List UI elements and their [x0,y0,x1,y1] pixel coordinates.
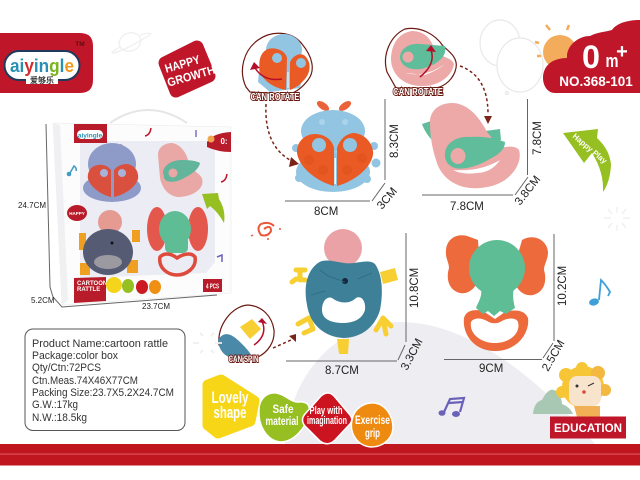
dimensions: box: 24.7CM [18,201,46,210]
product box [53,110,231,305]
box badge [67,205,87,221]
arrow: ladybug [266,104,299,167]
badge: happy growth: GROWTH [166,63,217,90]
dimensions: ladybug: 8.3CM [389,124,401,158]
callout: ladybug can rotate [242,33,312,103]
info panel: Ctn.Meas.74X46X77CM [32,375,138,387]
dimensions: elephant [444,234,569,375]
box logo [74,124,107,143]
callout: turtle can spin: CAN SPIN [228,354,259,365]
box elephant [147,207,208,275]
info panel [25,329,185,430]
background hill [285,322,595,444]
dimensions: ladybug: 8CM [314,206,338,218]
balloons [480,20,543,94]
icon: lion mascot [556,362,611,417]
dimensions: elephant: 2.5CM [540,338,568,374]
info panel: Product Name:cartoon rattle [32,338,168,350]
dimensions: bird [422,99,544,213]
toy: elephant [446,235,548,351]
feature badge: play with imagination: imagination [307,415,347,427]
box tag: 4 pcs: 4 PCS [206,284,219,290]
icon: sparkle [604,207,630,231]
dimensions: box: 23.7CM [142,302,170,311]
box music notes [67,128,227,262]
dimensions: box: 5.2CM [31,296,55,305]
icon: bush [533,390,573,414]
toy: bird [422,103,520,188]
icon: spiral [251,223,281,240]
dimensions: box [18,124,217,311]
label: education: EDUCATION [554,423,622,435]
toy: ladybug [292,99,380,192]
box ladybug [83,143,141,202]
feature badge: lovely shape: Lovely [212,388,249,407]
dimensions: bird: 7.8CM [532,121,544,155]
callout: turtle can spin [218,305,274,365]
box age tag [207,132,231,152]
feature badge: exercise grip: Exercise [355,413,390,427]
sun [535,25,577,69]
age cloud badge: + [616,41,628,63]
age cloud badge [543,20,640,93]
age cloud badge: m [606,51,618,71]
toy: turtle [292,229,398,354]
callout: ladybug can rotate: CAN ROTATE [250,92,300,103]
age cloud badge: 0 [582,39,600,75]
box text panel [74,277,161,303]
info panel: Qty/Ctn:72PCS [32,362,101,374]
box text panel: RATTLE [77,287,100,293]
dimensions: ladybug: 3CM [375,186,400,212]
feature badge: safe material: material [266,414,298,428]
dimensions: bird: 3.8CM [513,174,543,208]
dimensions: turtle: 3.3CM [399,337,426,372]
feature badge: safe material [259,393,309,442]
callout: bird can rotate [386,28,456,98]
box logo: aiyingle [78,132,102,140]
icon: blue music note [588,280,610,307]
logo panel: TM [75,41,85,48]
logo panel [0,33,93,93]
info panel: N.W.:18.5kg [32,412,87,424]
dimensions: elephant: 10.2CM [557,266,569,306]
arrow: happy play [563,129,611,192]
box badge: HAPPY [69,211,85,216]
callout: bird can rotate: CAN ROTATE [393,87,443,98]
feature badge: play with imagination: Play with [310,405,343,417]
box tag: 4 pcs [203,279,222,292]
box text panel: CARTOON [77,281,107,287]
badge: happy growth [162,47,217,91]
arrow: bird [460,66,492,124]
dimensions: elephant: 9CM [479,363,503,375]
box bird [158,143,203,197]
logo panel: 爱够乐 [30,75,54,85]
label: education [550,416,626,438]
dimensions: ladybug [285,99,401,218]
info panel: Package:color box [32,350,118,362]
feature badge: play with imagination [302,393,352,444]
logo panel: aiyingle [10,56,74,76]
age cloud badge: NO.368-101 [559,74,633,89]
info panel: Packing Size:23.7X5.2X24.7CM [32,387,174,399]
icon: planet [112,30,151,54]
arrow: happy play: Happy Play [571,132,609,166]
box age tag: 0: [220,137,228,146]
dimensions: turtle [286,233,426,377]
feature badge: exercise grip [351,403,393,447]
feature badge: safe material: Safe [272,402,294,416]
icon: sparkle left [193,333,222,353]
dimensions: turtle: 8.7CM [325,365,359,377]
bottom red band [0,444,640,466]
icon: purple music note [438,398,464,417]
badge: happy growth: HAPPY [163,52,202,76]
info panel: G.W.:17kg [32,399,78,411]
dimensions: bird: 7.8CM [450,201,484,213]
feature badge: lovely shape: shape [214,403,246,422]
feature badge: exercise grip: grip [365,426,380,440]
dimensions: turtle: 10.8CM [409,268,421,308]
feature badge: lovely shape [208,380,254,433]
arrow: turtle [273,334,296,348]
box tray [80,141,215,278]
box green arrow [202,193,224,223]
box turtle [79,210,140,275]
